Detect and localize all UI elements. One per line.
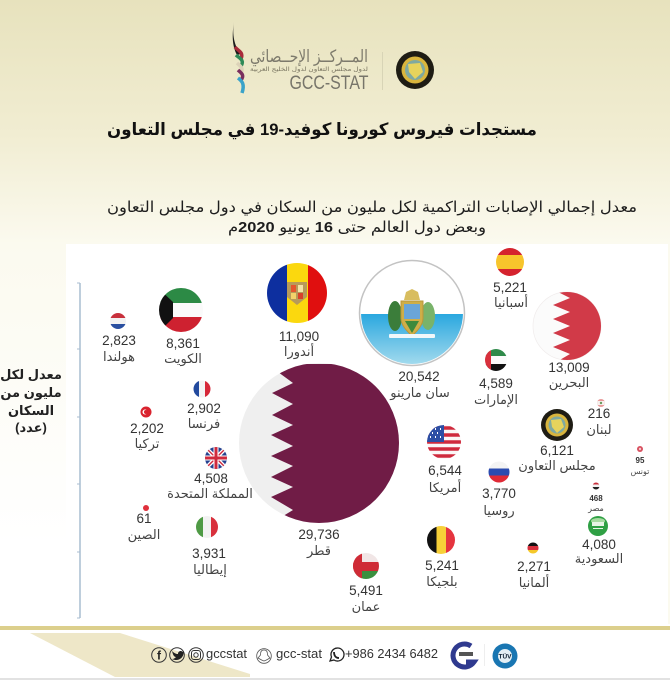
- logo: TUV: TÜV: [498, 652, 512, 660]
- logo emblem: [396, 51, 434, 89]
- bubble: Belgium: بلجيكا: [426, 574, 458, 589]
- bubble: Qatar: 29,736: [298, 527, 340, 542]
- bubble: United Kingdom: [167, 446, 253, 501]
- axis title: معدل لكل: [0, 367, 62, 382]
- bubble: Italy: إيطاليا: [193, 562, 227, 577]
- bubble: Spain: أسبانيا: [494, 294, 528, 310]
- bubble: Tunisia: تونس: [631, 467, 649, 476]
- bubble: Germany: [517, 542, 551, 590]
- bubble: Bahrain: البحرين: [549, 375, 589, 391]
- axis title: السكان: [8, 403, 54, 418]
- bubble: Turkey: 2,202: [130, 421, 164, 436]
- main title: مستجدات فيروس كورونا كوفيد-19 في مجلس التعاون: [107, 120, 537, 140]
- bubble: Russia: 3,770: [482, 486, 516, 501]
- axis title: مليون من: [0, 385, 62, 400]
- bubble: Germany: 2,271: [517, 559, 551, 574]
- bubble: Qatar: قطر: [306, 543, 331, 559]
- logo subtitle: لدول مجلس التعاون لدول الخليج العربية: [250, 66, 368, 73]
- icon: whatsapp: [330, 648, 344, 661]
- bubble: Spain: [493, 248, 528, 310]
- bubble: France: 2,902: [187, 401, 221, 416]
- bubble: Italy: [192, 516, 227, 577]
- bubble: Italy: 3,931: [192, 546, 226, 561]
- logo wordmark: GCC-STAT: [290, 73, 369, 94]
- bubble: Netherlands: [102, 312, 136, 365]
- bubble: Egypt: 468: [589, 494, 603, 503]
- bubble: San Marino: 20,542: [398, 369, 440, 384]
- bubble: GCC: [518, 409, 596, 474]
- subtitle: معدل إجمالي الإصابات التراكمية لكل مليون من السكان في دول مجلس التعاون: [107, 199, 637, 217]
- logo arabic name: المــركــز الإحــصائي: [250, 47, 368, 67]
- subtitle: [107, 199, 637, 236]
- bubble: Kuwait: الكويت: [164, 351, 202, 367]
- bubble: Kuwait: 8,361: [166, 336, 200, 351]
- bubble: Andorra: أندورا: [284, 343, 314, 360]
- bubble: Oman: [349, 553, 383, 614]
- bubble: Bahrain: 13,009: [548, 360, 590, 375]
- bubble: Andorra: [266, 262, 328, 360]
- bubble: Tunisia: 95: [636, 456, 645, 465]
- bubble: San Marino: [360, 260, 464, 401]
- bubble: San Marino: سان مارينو: [389, 385, 450, 401]
- phone number: +986 2434 6482: [345, 646, 438, 661]
- bubble: Egypt: مصر: [587, 504, 604, 513]
- bubble: USA: [426, 425, 462, 496]
- bubble: Qatar: [239, 363, 400, 559]
- bubble: Saudi Arabia: السعودية: [575, 551, 623, 567]
- bubble: China: [128, 505, 160, 543]
- bubble: France: فرنسا: [188, 416, 220, 432]
- bubble: Oman: 5,491: [349, 583, 383, 598]
- logo: quality certification: [453, 644, 474, 667]
- bubble: Lebanon: لبنان: [586, 422, 612, 437]
- bubble: UAE: [474, 348, 518, 408]
- icon: instagram: [189, 648, 203, 662]
- vertical axis: [77, 283, 80, 618]
- handle: gccstat: gccstat: [206, 646, 247, 661]
- bubble: Egypt: [587, 482, 604, 513]
- bubble: GCC: 6,121: [540, 443, 574, 458]
- bubble: UAE: الإمارات: [474, 392, 518, 408]
- bubble: USA: أمريكا: [429, 479, 461, 496]
- icon: snapchat: [257, 649, 271, 663]
- icon: twitter: [170, 648, 184, 662]
- bubble: France: [187, 380, 221, 432]
- bubble: Saudi Arabia: 4,080: [582, 537, 616, 552]
- bubble: China: الصين: [128, 527, 160, 543]
- bubble: Andorra: 11,090: [279, 329, 319, 344]
- logo: GCC-STAT: [233, 22, 434, 94]
- axis title: (عدد): [15, 420, 47, 435]
- bubble: United Kingdom: 4,508: [194, 471, 228, 486]
- bubble: Saudi Arabia: [575, 516, 623, 567]
- bubble: Netherlands: هولندا: [103, 349, 135, 365]
- bubble: Tunisia: [631, 446, 649, 476]
- bubble: Bahrain: [533, 292, 602, 391]
- bubble chart: [102, 248, 649, 614]
- bubble: GCC: مجلس التعاون: [518, 458, 596, 474]
- bubble: USA: 6,544: [428, 463, 462, 478]
- axis title: [0, 367, 62, 435]
- logo ribbon: [233, 22, 243, 93]
- bubble: Oman: عمان: [352, 599, 380, 614]
- bubble: UAE: 4,589: [479, 376, 513, 391]
- bubble: Turkey: تركيا: [135, 436, 160, 452]
- bubble: Lebanon: [587, 399, 610, 436]
- footer contacts: [152, 644, 517, 668]
- bubble: Netherlands: 2,823: [102, 333, 136, 348]
- bubble: China: 61: [136, 511, 152, 526]
- bubble: Russia: روسيا: [483, 503, 515, 519]
- bubble: Russia: [482, 461, 516, 519]
- bubble: Turkey: [130, 406, 164, 452]
- bubble: Lebanon: 216: [588, 406, 610, 421]
- icon: facebook: f: [157, 648, 162, 662]
- bubble: Germany: ألمانيا: [519, 574, 549, 590]
- handle: gcc-stat: gcc-stat: [276, 646, 322, 661]
- bubble: Kuwait: [158, 288, 204, 367]
- bubble: United Kingdom: المملكة المتحدة: [167, 486, 253, 501]
- bubble: Belgium: [425, 526, 459, 589]
- subtitle: وبعض دول العالم حتى 16 يونيو 2020م: [228, 219, 486, 236]
- bubble: Belgium: 5,241: [425, 558, 459, 573]
- bubble: Spain: 5,221: [493, 280, 527, 295]
- icon: facebook: [152, 648, 166, 662]
- logo: TUV: [492, 644, 518, 668]
